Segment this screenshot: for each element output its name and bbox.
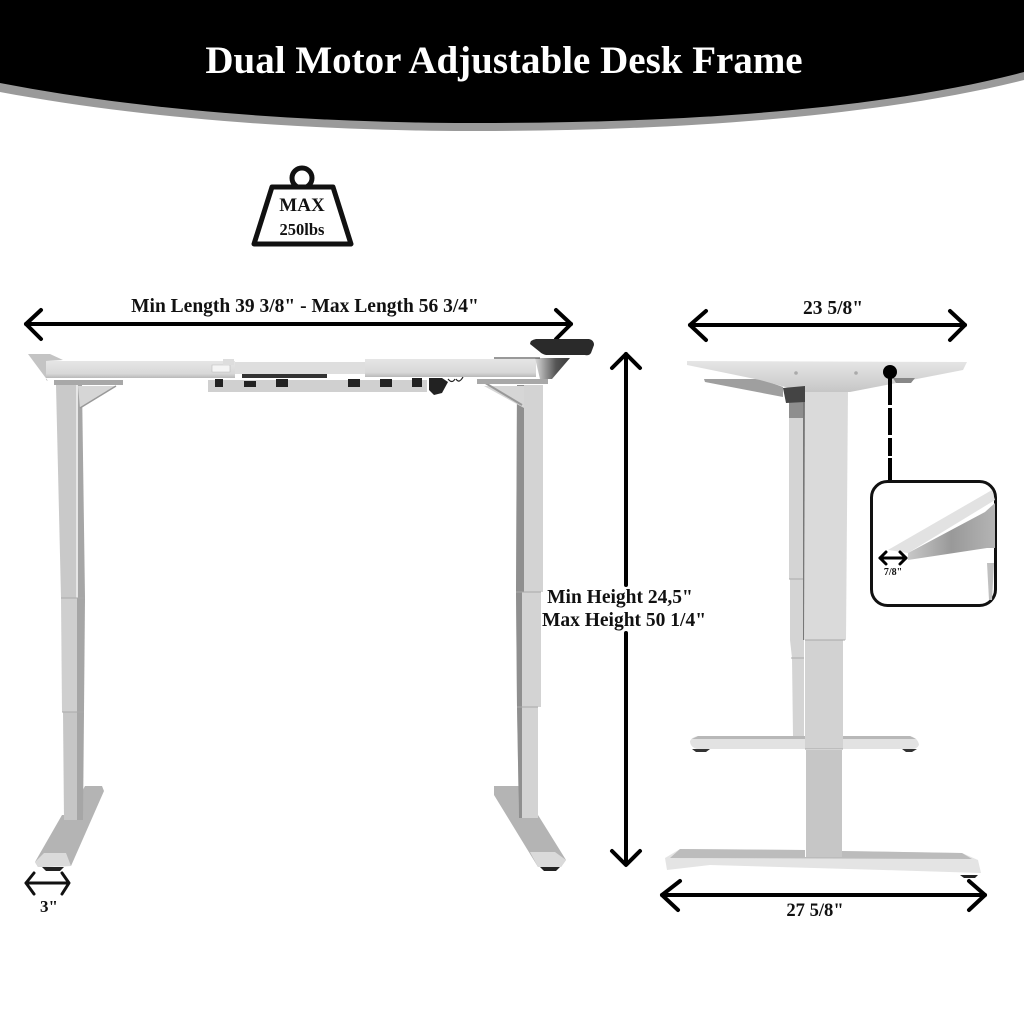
base foot (665, 849, 981, 873)
header banner (0, 0, 1024, 131)
height labels: Min Height 24,5" (547, 587, 693, 608)
depth label: 23 5/8" (803, 298, 863, 319)
front column (804, 388, 848, 640)
weight label: 250lbs (280, 220, 325, 239)
handset (530, 339, 594, 355)
left leg (35, 385, 116, 871)
rear column (789, 392, 804, 737)
arrow: desk length (26, 310, 571, 339)
bracket label: 7/8" (884, 567, 902, 578)
arrow: bracket width (880, 552, 906, 564)
length label: Min Length 39 3/8" - Max Length 56 3/4" (131, 296, 479, 317)
callout: bracket detail (872, 482, 996, 606)
top beam (28, 354, 570, 385)
arrow: height (612, 354, 640, 865)
foot label: 3" (40, 897, 58, 916)
arrow: foot width (26, 873, 69, 894)
max label: MAX (279, 195, 325, 216)
height labels: Max Height 50 1/4" (542, 610, 706, 631)
arrow: base width (662, 881, 985, 910)
front view of desk frame (28, 339, 594, 871)
right leg (482, 381, 566, 871)
arrow: depth (690, 311, 965, 340)
top plate (704, 379, 783, 397)
side view of desk frame (665, 361, 981, 878)
title: Dual Motor Adjustable Desk Frame (205, 39, 803, 82)
callout: dashed connector (883, 365, 897, 480)
rear foot (690, 736, 919, 749)
icon: max weight (254, 168, 351, 244)
height labels (542, 587, 706, 631)
control box (208, 359, 463, 395)
base label: 27 5/8" (786, 900, 844, 921)
